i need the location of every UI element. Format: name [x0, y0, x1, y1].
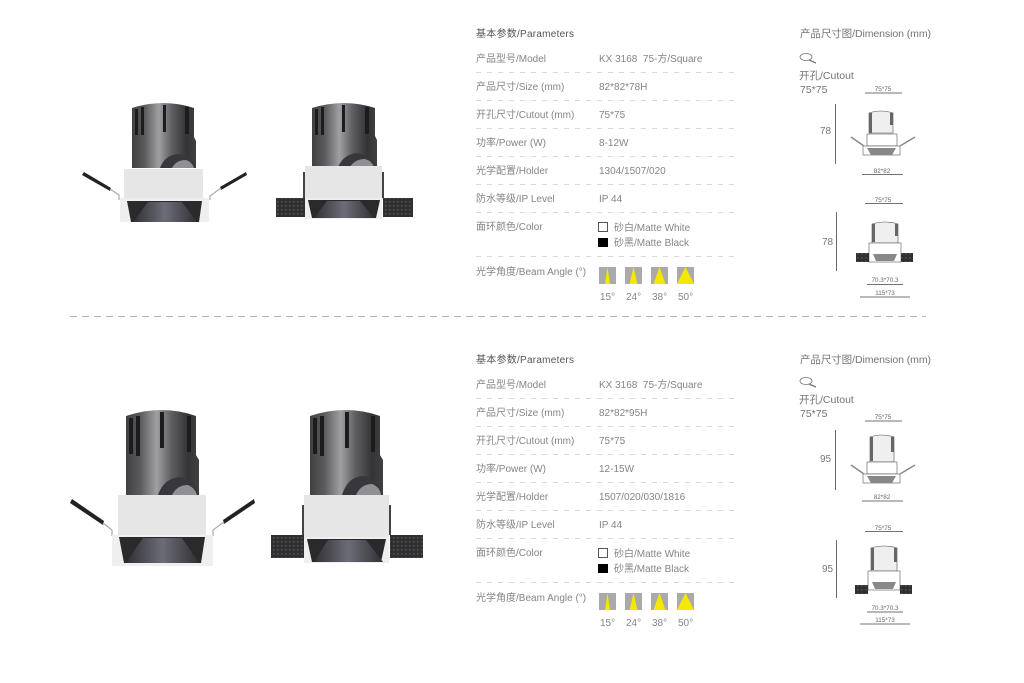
- row: size: 82*82*95H: [599, 408, 647, 419]
- row: IP level: 防水等级/IP Level: [476, 192, 555, 205]
- row: color: 面环颜色/Color: [476, 220, 543, 233]
- row: cutout: 开孔尺寸/Cutout (mm): [476, 108, 574, 121]
- row: size: 产品尺寸/Size (mm): [476, 406, 564, 419]
- drawing: wing lamp: 82*82: [874, 494, 891, 501]
- icon: cutout: [800, 378, 816, 387]
- row: beam angle: 50°: [678, 618, 693, 629]
- drawing: flange lamp: 75*75: [875, 197, 892, 204]
- heading: 基本参数/Parameters: [476, 27, 574, 40]
- cutout label: [799, 393, 854, 420]
- row: IP level: IP 44: [599, 194, 623, 205]
- row: power: 功率/Power (W): [476, 136, 546, 149]
- drawing: flange lamp: [822, 197, 913, 297]
- product photo: flange lamp, top row: [276, 103, 413, 219]
- row: IP level: IP 44: [599, 520, 623, 531]
- cutout label: 开孔/Cutout: [799, 69, 854, 82]
- row: model: KX 3168 75-方/Square: [599, 378, 703, 391]
- row: cutout: [476, 434, 626, 447]
- row: IP level: 防水等级/IP Level: [476, 518, 555, 531]
- row: color: 面环颜色/Color: [476, 546, 543, 559]
- cutout label: 75*75: [800, 84, 828, 96]
- icon: cutout: [800, 54, 816, 63]
- row: power: [476, 462, 635, 475]
- drawing: flange lamp: 75*75: [875, 525, 892, 532]
- row: cutout: [476, 108, 626, 121]
- drawing: flange lamp: 95: [822, 564, 834, 575]
- panel: parameters, bottom row: [476, 353, 738, 629]
- row: holder: 1304/1507/020: [599, 166, 666, 177]
- panel: dimensions, bottom row: [799, 353, 931, 624]
- row: color: 砂白/Matte White: [614, 221, 691, 234]
- row: beam angle: 38°: [652, 292, 667, 303]
- cutout label: [799, 69, 854, 96]
- row: holder: 光学配置/Holder: [476, 490, 549, 503]
- row: beam angle: 15°: [600, 618, 615, 629]
- row: cutout: 75*75: [599, 436, 626, 447]
- product photo: wing spring lamp, bottom row: [70, 410, 255, 566]
- row: power: [476, 136, 629, 149]
- drawing: flange lamp: 78: [822, 237, 834, 248]
- row: cutout: 75*75: [599, 110, 626, 121]
- row: color: 砂黑/Matte Black: [614, 562, 690, 575]
- row: holder: [476, 164, 666, 177]
- drawing: wing lamp: [820, 86, 915, 175]
- row: beam angle: [476, 591, 694, 629]
- drawing: wing lamp: 75*75: [875, 414, 892, 421]
- panel: parameters, top row: [476, 27, 738, 303]
- row: model: [476, 52, 703, 65]
- row: beam angle: [476, 265, 694, 303]
- panel: dimensions, top row: [799, 27, 931, 297]
- row: beam angle: 24°: [626, 618, 641, 629]
- row: color: [476, 220, 691, 249]
- row: holder: 1507/020/030/1816: [599, 492, 686, 503]
- divider: [70, 316, 926, 318]
- row: size: 82*82*78H: [599, 82, 647, 93]
- drawing: flange lamp: 115*73: [875, 290, 895, 297]
- row: beam angle: 38°: [652, 618, 667, 629]
- row: color: 砂白/Matte White: [614, 547, 691, 560]
- row: beam angle: 50°: [678, 292, 693, 303]
- row: model: 产品型号/Model: [476, 378, 546, 391]
- heading: 基本参数/Parameters: [476, 353, 574, 366]
- heading: 产品尺寸图/Dimension (mm): [800, 27, 931, 40]
- drawing: wing lamp: 78: [820, 126, 832, 137]
- heading: 产品尺寸图/Dimension (mm): [800, 353, 931, 366]
- drawing: wing lamp: 75*75: [875, 86, 892, 93]
- row: beam angle: 24°: [626, 292, 641, 303]
- row: beam angle: 15°: [600, 292, 615, 303]
- drawing: wing lamp: [820, 414, 915, 501]
- row: beam angle: 光学角度/Beam Angle (°): [476, 591, 586, 604]
- drawing: flange lamp: 115*73: [875, 617, 895, 624]
- row: color: 砂黑/Matte Black: [614, 236, 690, 249]
- row: holder: [476, 490, 686, 503]
- row: power: 8-12W: [599, 138, 629, 149]
- cutout label: 75*75: [800, 408, 828, 420]
- row: color: [476, 546, 691, 575]
- cutout label: 开孔/Cutout: [799, 393, 854, 406]
- row: size: [476, 80, 647, 93]
- product photo: wing spring lamp, top row: [82, 103, 247, 222]
- row: size: 产品尺寸/Size (mm): [476, 80, 564, 93]
- row: model: [476, 378, 703, 391]
- row: size: [476, 406, 647, 419]
- drawing: wing lamp: 82*82: [874, 168, 891, 175]
- drawing: flange lamp: 70.3*70.3: [872, 605, 899, 612]
- row: power: 功率/Power (W): [476, 462, 546, 475]
- drawing: wing lamp: 95: [820, 454, 832, 465]
- drawing: flange lamp: [822, 525, 912, 624]
- product photo: flange lamp, bottom row: [271, 410, 423, 563]
- row: model: KX 3168 75-方/Square: [599, 52, 703, 65]
- row: IP level: [476, 518, 623, 531]
- row: model: 产品型号/Model: [476, 52, 546, 65]
- row: cutout: 开孔尺寸/Cutout (mm): [476, 434, 574, 447]
- drawing: flange lamp: 70.3*70.3: [872, 277, 899, 284]
- row: power: 12-15W: [599, 464, 635, 475]
- row: IP level: [476, 192, 623, 205]
- row: holder: 光学配置/Holder: [476, 164, 549, 177]
- row: beam angle: 光学角度/Beam Angle (°): [476, 265, 586, 278]
